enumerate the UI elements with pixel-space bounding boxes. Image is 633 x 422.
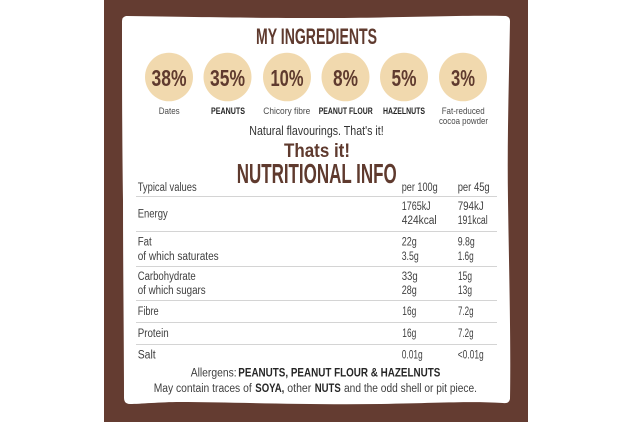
row: protein <box>138 328 473 340</box>
row: energy: 191kcal <box>458 215 488 227</box>
row: salt: <0.01g <box>458 350 484 362</box>
ingredient: fat-reduced cocoa powder 3%: cocoa powder <box>439 116 488 127</box>
row: carbohydrate <box>138 271 472 297</box>
row: energy: 424kcal <box>402 215 437 227</box>
nutrition table <box>136 182 497 362</box>
row: carbohydrate: 13g <box>458 285 472 297</box>
ingredient: dates 38%: Dates <box>159 106 180 117</box>
row: fibre: 7.2g <box>458 306 474 318</box>
traces warning: other <box>287 383 311 395</box>
row: fat: 3.5g <box>402 251 419 263</box>
row: protein: Protein <box>138 328 169 340</box>
traces warning: May contain traces of <box>154 383 252 395</box>
row: fat <box>138 236 475 263</box>
ingredient: hazelnuts 5%: HAZELNUTS <box>383 106 425 117</box>
row: carbohydrate: of which sugars <box>138 285 206 297</box>
brown background panel <box>104 0 528 422</box>
ingredient: peanut flour 8%: PEANUT FLOUR <box>319 106 373 117</box>
white content panel <box>122 16 510 404</box>
traces warning <box>154 383 477 395</box>
ingredient: peanut flour 8%: 8% <box>333 65 358 91</box>
row: energy: 794kJ <box>458 201 484 213</box>
row: carbohydrate: 33g <box>402 271 418 283</box>
allergens statement: PEANUTS, PEANUT FLOUR & HAZELNUTS <box>238 368 441 380</box>
ingredient: fat-reduced cocoa powder 3%: 3% <box>451 65 475 91</box>
row: protein: 7.2g <box>458 328 474 340</box>
row: fat: 1.6g <box>458 251 474 263</box>
table header row: Typical values <box>138 182 197 194</box>
table header row: per 100g <box>402 182 438 194</box>
heading: my ingredients: MY INGREDIENTS <box>256 24 377 49</box>
ingredient: dates 38% <box>145 53 193 117</box>
row: carbohydrate: 15g <box>458 271 472 283</box>
row: carbohydrate: 28g <box>402 285 417 297</box>
ingredient: hazelnuts 5%: 5% <box>392 65 416 91</box>
traces warning: and the odd shell or pit piece. <box>344 383 477 395</box>
row: energy: Energy <box>138 208 168 220</box>
ingredient: peanuts 35%: PEANUTS <box>211 106 245 117</box>
traces warning: NUTS <box>315 383 341 395</box>
subheading: thats it: Thats it! <box>284 140 350 162</box>
row: salt: 0.01g <box>402 350 423 362</box>
row: fibre: Fibre <box>138 306 159 318</box>
row: fibre <box>138 306 473 318</box>
row: fat: 22g <box>402 236 417 248</box>
row: fat: 9.8g <box>458 236 475 248</box>
ingredient: peanut flour 8% <box>319 53 373 117</box>
ingredient: peanuts 35% <box>204 53 252 117</box>
row: energy: 1765kJ <box>402 201 431 213</box>
heading: nutritional info: NUTRITIONAL INFO <box>237 158 397 189</box>
row: salt <box>138 350 484 362</box>
ingredient: fat-reduced cocoa powder 3%: Fat-reduced <box>442 106 485 117</box>
row: carbohydrate: Carbohydrate <box>138 271 196 283</box>
row: protein: 16g <box>402 328 416 340</box>
traces warning: SOYA, <box>255 383 284 395</box>
ingredient: chicory fibre 10% <box>263 53 311 117</box>
table header row <box>138 182 490 194</box>
ingredient: hazelnuts 5% <box>380 53 428 117</box>
text: natural flavourings: Natural flavourings. That's it! <box>249 124 384 138</box>
ingredient: dates 38%: 38% <box>152 65 186 91</box>
row: fibre: 16g <box>402 306 416 318</box>
table header row: per 45g <box>458 182 490 194</box>
ingredient: chicory fibre 10%: Chicory fibre <box>263 106 310 117</box>
row: fat: Fat <box>138 236 152 248</box>
ingredient: chicory fibre 10%: 10% <box>270 65 304 91</box>
row: energy <box>138 201 488 227</box>
ingredient: peanuts 35%: 35% <box>210 65 245 91</box>
ingredient circles <box>145 53 488 127</box>
row: salt: Salt <box>138 350 156 362</box>
allergens statement: Allergens: <box>191 368 237 380</box>
ingredient: fat-reduced cocoa powder 3% <box>439 53 488 127</box>
row: fat: of which saturates <box>138 251 219 263</box>
